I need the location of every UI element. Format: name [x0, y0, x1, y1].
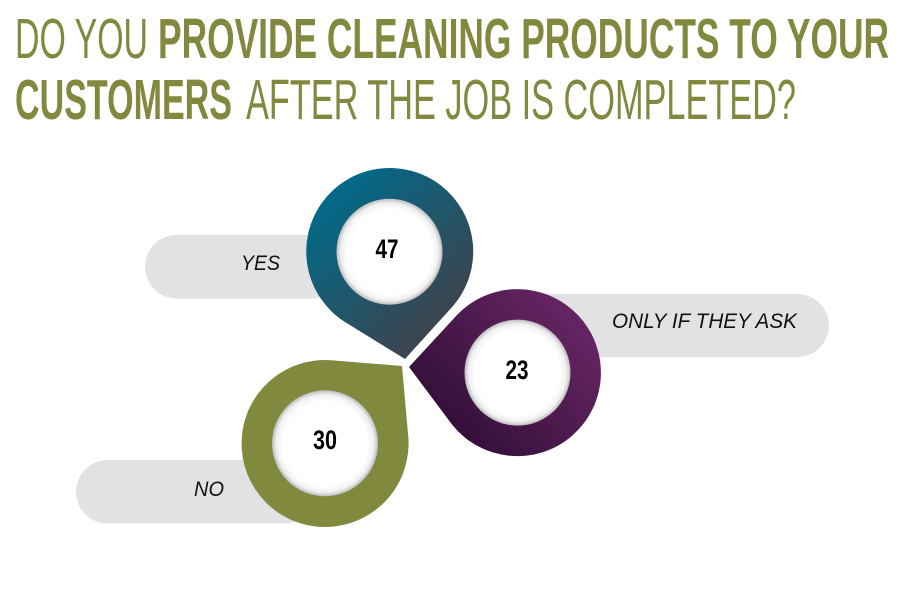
- label pill: yes: [145, 235, 345, 298]
- pin: yes 47: [306, 168, 473, 359]
- label pill: only if they ask: [500, 294, 829, 357]
- pin: only if they ask 23: [409, 289, 601, 456]
- label pill: yes: YES: [241, 252, 280, 275]
- pin: no 30: 30: [313, 425, 337, 455]
- pin: yes 47: 47: [376, 234, 398, 264]
- title: [15, 7, 889, 132]
- label pill: no: NO: [194, 478, 224, 501]
- title: DO YOU: [15, 7, 148, 71]
- pin: only if they ask 23: 23: [506, 355, 528, 385]
- label pill: no: [76, 460, 316, 524]
- pin: no 30: [242, 360, 409, 527]
- title: CUSTOMERS: [15, 68, 232, 132]
- label pill: only if they ask: ONLY IF THEY ASK: [612, 310, 798, 333]
